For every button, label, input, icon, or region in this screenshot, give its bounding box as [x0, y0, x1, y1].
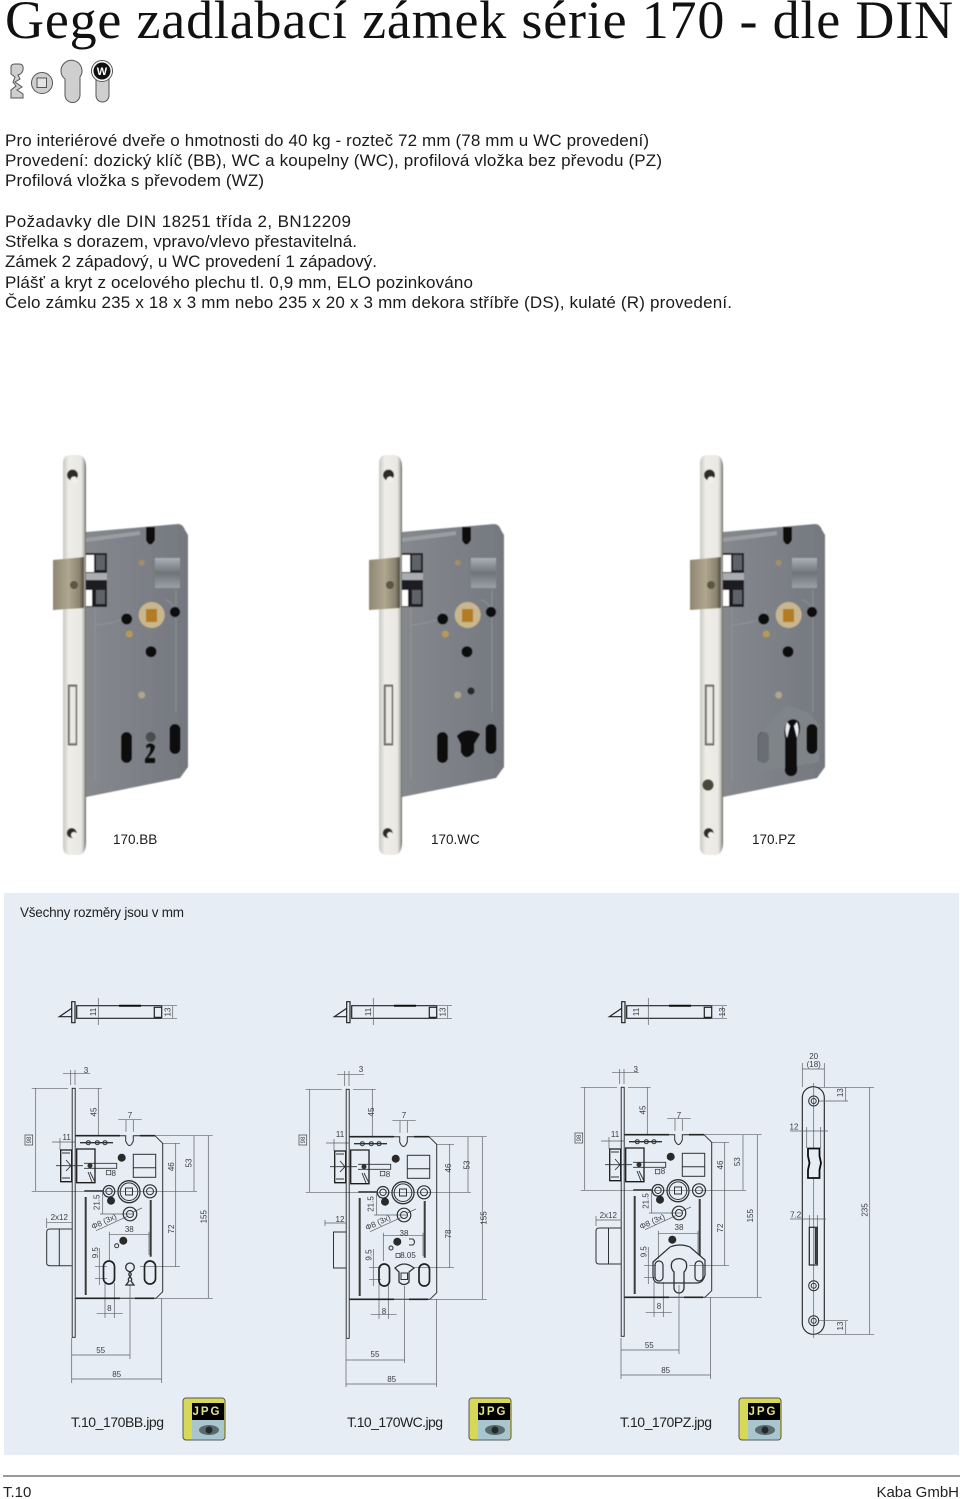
- technical drawing BB: [25, 1066, 213, 1383]
- technical drawing faceplate: 7.2: [790, 1210, 802, 1220]
- bolt drawing 1: 13: [164, 1007, 172, 1016]
- technical drawing WC: 8: [382, 1307, 387, 1316]
- icon: JPG PZ: [739, 1398, 781, 1440]
- requirements text: [5, 212, 732, 312]
- technical drawing WC: 38: [400, 1229, 409, 1238]
- intro text: Pro interiérové dveře o hmotnosti do 40 kg - rozteč 72 mm (78 mm u WC provedení): [5, 131, 649, 150]
- technical drawing WC: 78: [444, 1229, 453, 1238]
- technical drawing WC: 8: [386, 1170, 391, 1179]
- requirements text: Střelka s dorazem, vpravo/vlevo přestavitelná.: [5, 232, 357, 251]
- icon row: lock types: [11, 60, 112, 102]
- technical drawing PZ: 155: [746, 1208, 755, 1222]
- technical drawing BB: 2x12: [51, 1213, 69, 1222]
- technical drawing WC: 85: [387, 1375, 397, 1384]
- panel note: Všechny rozměry jsou v mm: [20, 905, 184, 920]
- technical drawing PZ: 98: [577, 1134, 583, 1141]
- technical drawing faceplate: 12: [790, 1122, 799, 1132]
- file label WC: T.10_170WC.jpg: [347, 1414, 443, 1430]
- icon row: lock types: W: [97, 66, 108, 78]
- caption 170.PZ: 170.PZ: [752, 832, 796, 847]
- technical drawing BB: 8: [107, 1304, 112, 1313]
- technical drawing faceplate: 235: [861, 1203, 870, 1217]
- photo: lock 170.WC: [369, 455, 504, 855]
- icon: JPG WC: JPG: [478, 1406, 508, 1418]
- technical drawing BB: Φ8 (3x): [90, 1212, 118, 1231]
- file label PZ: T.10_170PZ.jpg: [620, 1414, 712, 1430]
- technical drawing BB: 53: [184, 1158, 194, 1167]
- bolt drawing 3: [609, 998, 727, 1025]
- technical drawing WC: Φ8 (3x): [364, 1213, 392, 1232]
- technical drawing BB: 45: [90, 1107, 98, 1116]
- technical drawing WC: 12: [336, 1215, 345, 1224]
- technical drawing WC: 9.5: [364, 1249, 374, 1261]
- technical drawing BB: 55: [96, 1346, 106, 1355]
- technical drawing PZ: 45: [638, 1105, 648, 1114]
- bolt drawing 1: 11: [89, 1007, 98, 1016]
- technical drawing BB: 8: [111, 1169, 116, 1178]
- technical drawing BB: 21.5: [92, 1194, 102, 1210]
- technical drawing BB: 9.5: [91, 1247, 100, 1258]
- technical drawing PZ: Φ8 (3x): [638, 1212, 667, 1231]
- technical drawing faceplate: 13: [836, 1088, 845, 1097]
- technical drawing BB: 85: [112, 1370, 122, 1379]
- panel: dimensions: [4, 893, 959, 1455]
- technical drawing BB: 46: [167, 1162, 176, 1171]
- requirements text: Požadavky dle DIN 18251 třída 2, BN12209: [5, 212, 351, 231]
- technical drawing BB: 38: [125, 1225, 134, 1234]
- bolt drawing 3: 11: [632, 1007, 641, 1016]
- file label BB: T.10_170BB.jpg: [71, 1414, 164, 1430]
- technical drawing PZ: 21.5: [642, 1193, 650, 1209]
- technical drawing BB: 11: [63, 1133, 71, 1142]
- technical drawing WC: 55: [371, 1350, 380, 1359]
- bolt drawing 3: 13: [718, 1007, 727, 1016]
- caption 170.WC: 170.WC: [431, 832, 480, 847]
- technical drawing faceplate: 20: [809, 1052, 819, 1061]
- technical drawing WC: 21.5: [366, 1196, 376, 1212]
- intro text: [5, 131, 662, 190]
- bolt drawing 2: 11: [364, 1007, 373, 1016]
- technical drawing PZ: 9.5: [640, 1246, 648, 1257]
- technical drawing BB: 155: [200, 1209, 208, 1223]
- caption 170.BB: 170.BB: [113, 832, 157, 847]
- technical drawing WC: 45: [367, 1107, 376, 1116]
- technical drawing PZ: 11: [611, 1130, 620, 1139]
- icon: JPG PZ: JPG: [748, 1406, 778, 1418]
- requirements text: Zámek 2 západový, u WC provedení 1 západový.: [5, 252, 377, 271]
- bolt drawing 1: [59, 998, 177, 1025]
- technical drawing PZ: 3: [633, 1065, 638, 1074]
- technical drawing PZ: [575, 1065, 762, 1379]
- technical drawing WC: 98: [301, 1136, 307, 1143]
- technical drawing WC: 53: [462, 1160, 472, 1169]
- requirements text: Plášť a kryt z ocelového plechu tl. 0,9 mm, ELO pozinkováno: [5, 273, 473, 292]
- technical drawing PZ: 53: [733, 1157, 742, 1166]
- technical drawing WC: 46: [444, 1163, 453, 1172]
- technical drawing PZ: 38: [675, 1223, 684, 1232]
- technical drawing PZ: 8: [657, 1302, 662, 1311]
- technical drawing WC: 11: [336, 1130, 345, 1139]
- technical drawing WC: 155: [480, 1211, 488, 1225]
- intro text: Provedení: dozický klíč (BB), WC a koupelny (WC), profilová vložka bez převodu (PZ): [5, 151, 662, 170]
- icon: JPG BB: [183, 1398, 225, 1440]
- technical drawing PZ: 55: [645, 1341, 654, 1350]
- technical drawing BB: 72: [167, 1224, 176, 1233]
- technical drawing WC: [299, 1065, 488, 1387]
- technical drawing faceplate: 13: [836, 1321, 845, 1330]
- technical drawing WC: 8.05: [400, 1251, 416, 1260]
- technical drawing PZ: 8: [661, 1167, 666, 1176]
- technical drawing PZ: 46: [716, 1160, 725, 1169]
- technical drawing PZ: 85: [661, 1366, 671, 1375]
- requirements text: Čelo zámku 235 x 18 x 3 mm nebo 235 x 20 x 3 mm dekora stříbře (DS), kulaté (R) provedení.: [5, 293, 732, 312]
- technical drawing PZ: 7: [677, 1111, 682, 1120]
- bolt drawing 2: [334, 998, 452, 1025]
- technical drawing WC: 3: [359, 1065, 364, 1074]
- technical drawing BB: 3: [84, 1066, 89, 1075]
- bolt drawing 2: 13: [438, 1007, 448, 1016]
- technical drawing WC: 7: [402, 1111, 407, 1120]
- icon: JPG WC: [469, 1398, 511, 1440]
- technical drawing PZ: 72: [716, 1223, 725, 1232]
- technical drawing faceplate: [790, 1052, 874, 1338]
- technical drawing BB: 98: [27, 1136, 33, 1143]
- technical drawing PZ: 2x12: [600, 1211, 618, 1220]
- icon: JPG BB: JPG: [192, 1406, 222, 1418]
- intro text: Profilová vložka s převodem (WZ): [5, 171, 264, 190]
- photo: lock 170.BB: [53, 455, 188, 855]
- technical drawing BB: 7: [128, 1111, 133, 1120]
- photo: lock 170.PZ: [690, 455, 825, 855]
- technical drawing faceplate: (18): [807, 1060, 821, 1069]
